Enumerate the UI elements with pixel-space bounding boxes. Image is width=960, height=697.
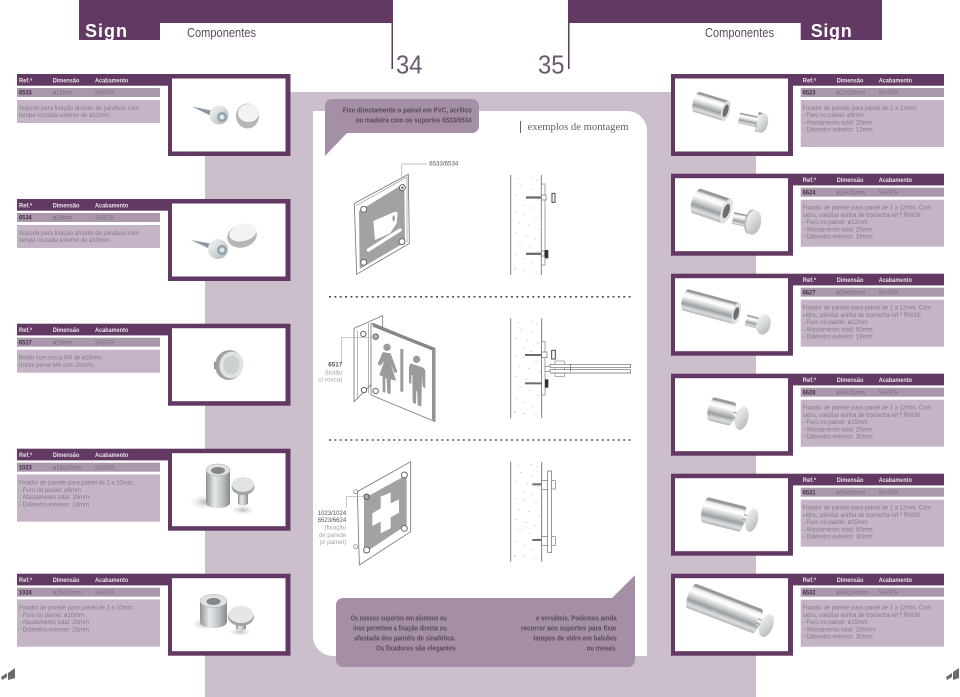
reference row: SA/STA xyxy=(879,589,899,596)
description: - Diâmetro exterior: 30mm xyxy=(803,534,873,541)
product card: 6624 xyxy=(671,174,944,256)
callout: bottom speech bubble: Os nossos suportes em alumínio ou xyxy=(351,614,447,623)
description: Fixador de parede para painel de 2 a 10mm; xyxy=(19,480,134,487)
header bar: Ref.ª xyxy=(803,577,816,584)
description: Fixador de parede para painel de 2 a 12mm. Com xyxy=(803,405,931,412)
label: 1023/1024 6523/6624: p/ painel) xyxy=(320,539,346,546)
description: vidro, solicitar anilha de borracha ref.ª RW30. xyxy=(803,512,922,519)
reference row xyxy=(801,88,944,97)
label: 6517 botão c/ rosca: 6517 xyxy=(328,362,343,369)
header bar: Dimensão xyxy=(837,477,863,484)
photo frame xyxy=(168,324,290,406)
header bar: Dimensão xyxy=(837,277,863,284)
description: tampa roscada exterior de ø19mm. xyxy=(19,237,111,244)
reference row: ø12x20mm xyxy=(836,90,865,97)
header: left page: Sign xyxy=(85,21,127,41)
header bar: Ref.ª xyxy=(803,477,816,484)
header bar: Acabamento xyxy=(879,277,912,284)
description xyxy=(17,350,160,373)
label: 1023/1024 6523/6624: 1023/1024 xyxy=(318,510,347,517)
description: - Diâmetro exterior: 30mm xyxy=(803,434,873,441)
header bar xyxy=(17,449,168,460)
header bar: Dimensão xyxy=(837,377,863,384)
reference row xyxy=(17,338,160,347)
callout: bottom speech bubble xyxy=(336,575,635,667)
reference row xyxy=(17,463,160,472)
description: - Diâmetro exterior: 19mm xyxy=(803,334,873,341)
heading: Componentes right: Componentes xyxy=(705,25,774,40)
photo frame xyxy=(671,74,793,156)
description: vidro, solicitar anilha de borracha ref.ª RW19; xyxy=(803,312,922,319)
description: Fixador de parede para painel de 2 a 12mm. Com xyxy=(803,205,931,212)
description: - Afastamento total: 25mm xyxy=(803,226,873,233)
header bar: Ref.ª xyxy=(803,177,816,184)
reference row: ø19mm xyxy=(53,215,72,222)
callout: bottom speech bubble: e versáteis. Podemos ainda xyxy=(536,614,618,623)
header bar: Ref.ª xyxy=(19,202,32,210)
label: 1023/1024 6523/6624: (fixação xyxy=(324,524,347,531)
reference row xyxy=(801,488,944,497)
reference row xyxy=(17,88,160,97)
header bar: Acabamento xyxy=(879,577,912,584)
product card: 6523 xyxy=(671,74,944,156)
photo: fixing 1024 xyxy=(189,594,254,637)
reference row: SA/STA xyxy=(879,289,899,296)
header bar xyxy=(793,74,944,86)
header bar: Ref.ª xyxy=(19,452,32,459)
description: - Furo no painel: ø15mm xyxy=(803,419,868,426)
reference row: 6627 xyxy=(803,289,816,296)
photo frame xyxy=(168,574,290,656)
description: - Diâmetro exterior: 30mm xyxy=(803,634,873,641)
description xyxy=(801,400,944,447)
reference row: 6534 xyxy=(19,215,32,222)
description xyxy=(801,100,944,147)
header bar: Acabamento xyxy=(879,177,912,184)
description: - Afastamento total: 25mm xyxy=(803,426,873,433)
reference row: 6531 xyxy=(803,489,816,496)
reference row xyxy=(801,388,944,397)
photo: fixing 6627 xyxy=(679,288,773,336)
header bar: Ref.ª xyxy=(19,577,32,584)
reference row: SA/STA xyxy=(879,389,899,396)
header bar xyxy=(17,324,168,335)
reference row: 6523 xyxy=(803,90,816,97)
header: right page: Sign xyxy=(811,21,852,41)
header bar: Dimensão xyxy=(53,202,79,210)
description: vidro, solicitar anilha de borracha ref.ª RW30. xyxy=(803,612,922,619)
reference row: ø30x100mm xyxy=(836,589,868,596)
sign: coffee cup xyxy=(354,174,409,274)
description: Suporte para fixação através de parafuso com xyxy=(19,230,139,237)
callout: bottom speech bubble: afastada dos painéis de sinalética. xyxy=(354,634,456,643)
description: - Afastamento total: 20mm xyxy=(803,119,873,126)
section diagram: standoff mount xyxy=(511,462,555,562)
header bar: Acabamento xyxy=(95,452,128,459)
header bar: Ref.ª xyxy=(803,377,816,384)
reference row: ø14x20mm xyxy=(53,464,82,471)
reference row: 6628 xyxy=(803,389,816,396)
header bar xyxy=(793,474,944,485)
photo: fixing 6628 xyxy=(705,396,751,431)
header bar: Acabamento xyxy=(879,78,912,84)
description: - Diâmetro exterior: 14mm xyxy=(19,501,89,508)
photo: fixing 6523 xyxy=(690,91,770,134)
description: - Furo no painel: ø12mm xyxy=(803,319,868,326)
description: Suporte para fixação através de parafuso com xyxy=(19,105,139,112)
header bar xyxy=(793,274,944,285)
label: 6517 botão c/ rosca: c/ rosca) xyxy=(318,377,342,384)
reference row: SA/STA xyxy=(95,90,115,97)
header bar: Dimensão xyxy=(837,577,863,584)
header: right page xyxy=(568,0,882,69)
section diagram: projecting mount xyxy=(511,318,631,418)
product card: 1023 xyxy=(17,449,290,531)
product card: 6533 xyxy=(17,74,290,156)
callout: bottom speech bubble: ou mesas. xyxy=(587,644,617,653)
header bar: Ref.ª xyxy=(19,327,32,334)
description: Fixador de parede para painel de 2 a 12mm. Com xyxy=(803,505,931,512)
reference row xyxy=(801,288,944,297)
label: 1023/1024 6523/6624 xyxy=(318,497,363,546)
photo frame xyxy=(168,449,290,531)
photo frame xyxy=(671,174,793,256)
description: - Furo no painel: ø8mm xyxy=(19,487,81,494)
page number 34: 34 xyxy=(396,50,422,80)
heading: Componentes left: Componentes xyxy=(187,25,256,40)
callout: bottom speech bubble: tampos de vidro em balcões xyxy=(533,634,617,643)
panel: mounting examples xyxy=(313,111,647,656)
reference row: ø19x50mm xyxy=(836,289,865,296)
description: (Inclui perno M4 com 20mm). xyxy=(19,362,95,369)
description: Fixador de parede para painel de 2 a 10mm; xyxy=(19,605,134,612)
description xyxy=(17,100,160,123)
reference row: ø19mm xyxy=(53,339,72,346)
product card: 6517 xyxy=(17,324,290,406)
header: left page xyxy=(79,0,393,69)
photo frame xyxy=(671,374,793,456)
header bar xyxy=(17,574,168,585)
header bar: Acabamento xyxy=(95,577,128,584)
header bar: Acabamento xyxy=(95,202,128,210)
reference row: SA/STA xyxy=(879,489,899,496)
description: - Diâmetro exterior: 25mm xyxy=(19,626,89,633)
photo: fixing 6532 xyxy=(684,582,777,639)
product card: 1024 xyxy=(17,574,290,656)
product card: 6627 xyxy=(671,274,944,356)
description: - Afastamento total: 50mm xyxy=(803,326,873,333)
header bar: Acabamento xyxy=(879,477,912,484)
product card: 6531 xyxy=(671,474,944,556)
header bar: Dimensão xyxy=(53,452,79,459)
label: 6517 botão c/ rosca xyxy=(318,337,376,384)
description: Fixador de parede para painel de 2 a 12mm; xyxy=(803,105,918,112)
reference row xyxy=(801,588,944,597)
description xyxy=(801,600,944,647)
description xyxy=(17,225,160,248)
reference row: ø30x25mm xyxy=(836,389,865,396)
reference row: 6624 xyxy=(803,189,816,196)
header bar: Dimensão xyxy=(53,577,79,584)
product card: 6628 xyxy=(671,374,944,456)
reference row: ø12mm xyxy=(53,90,72,97)
header bar: Dimensão xyxy=(837,78,863,84)
reference row: SA/STA xyxy=(879,90,899,97)
photo: button xyxy=(212,347,247,383)
section diagram: cap mount xyxy=(511,175,555,275)
reference row xyxy=(17,588,160,597)
description: - Furo no painel: ø15mm xyxy=(803,519,868,526)
description xyxy=(801,300,944,347)
description xyxy=(801,500,944,547)
photo: screw and cap xyxy=(191,221,259,259)
description: Botão com rosca M4 de ø19mm. xyxy=(19,355,103,362)
description: - Furo no painel: ø12mm xyxy=(803,219,868,226)
callout: bottom speech bubble: recorrer aos suportes para fixar xyxy=(521,624,617,633)
photo: fixing 1023 xyxy=(187,464,257,516)
photo frame xyxy=(671,274,793,356)
header bar: Ref.ª xyxy=(803,277,816,284)
reference row: SA/STA xyxy=(95,215,115,222)
header bar: Dimensão xyxy=(53,78,79,84)
photo: fixing 6624 xyxy=(688,187,763,236)
description: - Afastamento total: 100mm xyxy=(803,626,876,633)
page number 35: 35 xyxy=(538,50,564,80)
dotted separators xyxy=(329,297,632,440)
reference row: SA/STA xyxy=(95,339,115,346)
sign: first aid cross xyxy=(354,462,411,565)
description xyxy=(17,474,160,522)
product card: 6534 xyxy=(17,199,290,281)
header bar: Ref.ª xyxy=(803,78,816,84)
label: 1023/1024 6523/6624: de parede xyxy=(319,532,347,539)
header bar: Acabamento xyxy=(95,327,128,334)
reference row: ø30x50mm xyxy=(836,489,865,496)
photo frame xyxy=(671,474,793,556)
callout: bottom speech bubble: Os fixadores são elegantes xyxy=(376,644,456,653)
reference row: SA/STA xyxy=(95,589,115,596)
reference row: 6532 xyxy=(803,589,816,596)
description: vidro, solicitar anilha de borracha ref.ª RW19; xyxy=(803,212,922,219)
description xyxy=(17,599,160,647)
product card: 6532 xyxy=(671,574,944,656)
description: - Furo no painel: ø15mm xyxy=(803,619,868,626)
description: - Afastamento total: 20mm xyxy=(19,494,89,501)
description: Fixador de parede para painel de 2 a 12mm. Com xyxy=(803,305,931,312)
callout: bottom speech bubble: inox permitem a fixação directa ou xyxy=(353,624,447,633)
reference row: 6533 xyxy=(19,90,32,97)
header bar xyxy=(793,174,944,185)
callout: top speech bubble: Fixe directamente o painel em PVC, acrílico xyxy=(343,106,472,115)
background: mauve central block xyxy=(205,92,756,697)
label: 6533/6534 xyxy=(402,160,459,177)
reference row: ø25x20mm xyxy=(53,589,82,596)
description: vidro, solicitar anilha de borracha ref.ª RW30. xyxy=(803,412,922,419)
header bar: Acabamento xyxy=(879,377,912,384)
callout: top speech bubble xyxy=(325,99,479,156)
header bar xyxy=(793,574,944,585)
description xyxy=(801,200,944,247)
reference row xyxy=(801,188,944,197)
header bar: Ref.ª xyxy=(19,78,32,84)
description: tampa roscada exterior de ø12mm. xyxy=(19,112,111,119)
header bar: Dimensão xyxy=(837,177,863,184)
photo frame xyxy=(168,199,290,281)
callout: top speech bubble: ou madeira com os suportes 6533/6534 xyxy=(356,116,472,125)
sign: toilets, projecting xyxy=(354,316,435,422)
label: 1023/1024 6523/6624: 6523/6624 xyxy=(318,517,347,524)
logo: left footer xyxy=(1,668,15,680)
description: - Afastamento total: 20mm xyxy=(19,619,89,626)
description: - Furo no painel: ø10mm xyxy=(19,612,84,619)
header bar: Dimensão xyxy=(53,327,79,334)
reference row: SA/STA xyxy=(95,464,115,471)
header bar xyxy=(17,199,168,211)
description: - Diâmetro exterior: 12mm xyxy=(803,127,873,134)
description: - Furo no painel: ø9mm xyxy=(803,112,864,119)
reference row xyxy=(17,213,160,222)
reference row: ø19x25mm xyxy=(836,189,865,196)
photo frame xyxy=(168,74,290,156)
photo: fixing 6531 xyxy=(699,496,760,533)
description: Fixador de parede para painel de 2 a 12mm. Com xyxy=(803,605,931,612)
header bar xyxy=(17,74,168,86)
label: 6533/6534: 6533/6534 xyxy=(429,160,459,168)
reference row: 1023 xyxy=(19,464,32,471)
reference row: 1024 xyxy=(19,589,32,596)
reference row: SA/STA xyxy=(879,189,899,196)
header bar: Acabamento xyxy=(95,78,128,84)
photo frame xyxy=(671,574,793,656)
logo: right footer xyxy=(946,668,959,680)
photo: screw and cap xyxy=(192,104,259,128)
reference row: 6517 xyxy=(19,339,32,346)
description: - Afastamento total: 50mm xyxy=(803,526,873,533)
header bar xyxy=(793,374,944,385)
label: 6517 botão c/ rosca: (botão xyxy=(325,369,343,376)
description: - Diâmetro exterior: 19mm xyxy=(803,234,873,240)
heading: exemplos de montagem: exemplos de montagem xyxy=(528,121,629,133)
